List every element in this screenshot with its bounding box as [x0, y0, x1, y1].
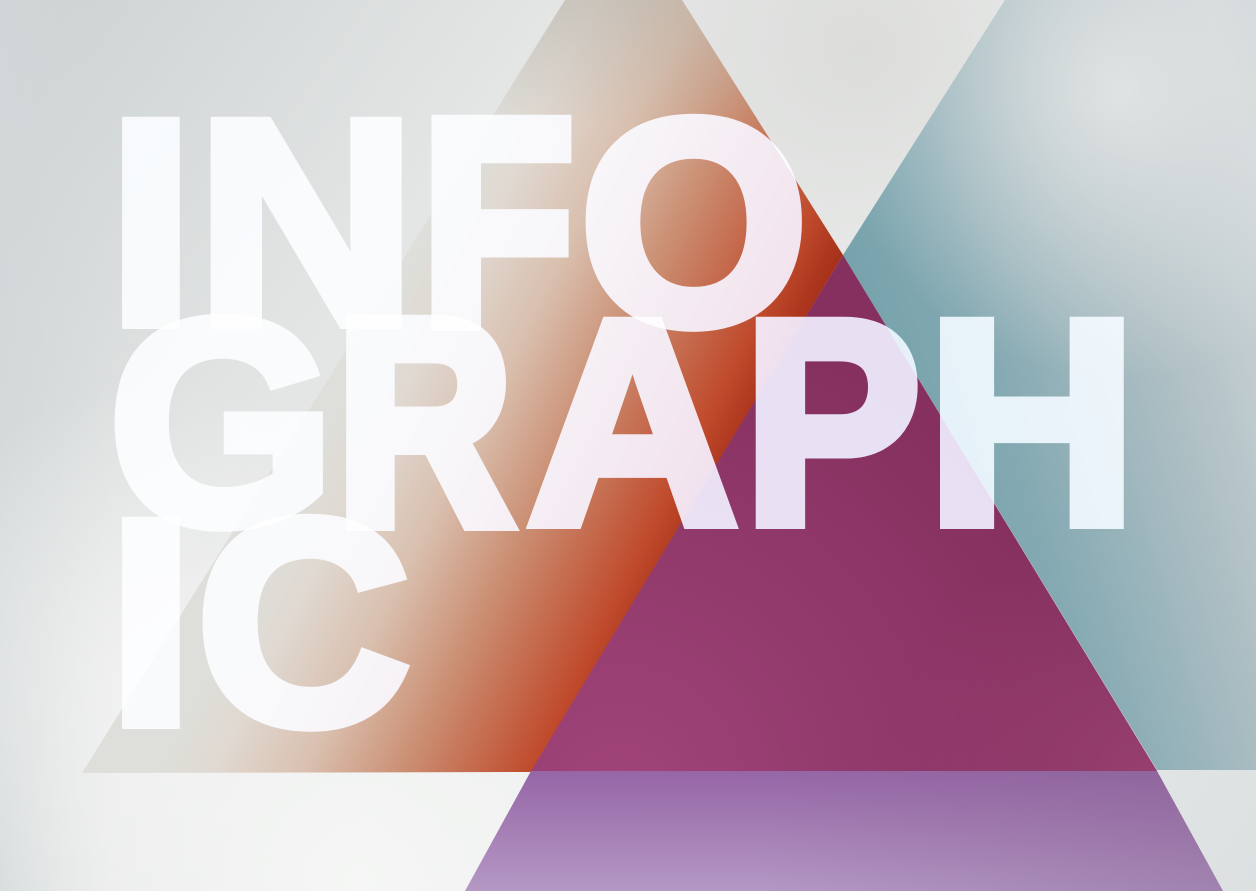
title line 2: GRAPH: G: [109, 260, 335, 585]
title line 1: INFO: F: [422, 60, 574, 385]
teal triangle: [843, 0, 1256, 770]
title line 3: IC: C: [196, 460, 410, 785]
title line 2: GRAPH: H: [926, 260, 1137, 585]
purple triangle: [465, 255, 1223, 891]
orange triangle: [82, 0, 843, 773]
title line 1: INFO: I: [108, 60, 194, 385]
title line 3: IC: I: [108, 460, 194, 785]
title line 1: INFO: N: [197, 60, 416, 385]
title line 2: GRAPH: P: [743, 260, 921, 585]
title line 2: GRAPH: R: [337, 260, 513, 585]
title line 1: INFO: O: [580, 60, 808, 385]
title line 2: GRAPH: A: [527, 260, 738, 585]
